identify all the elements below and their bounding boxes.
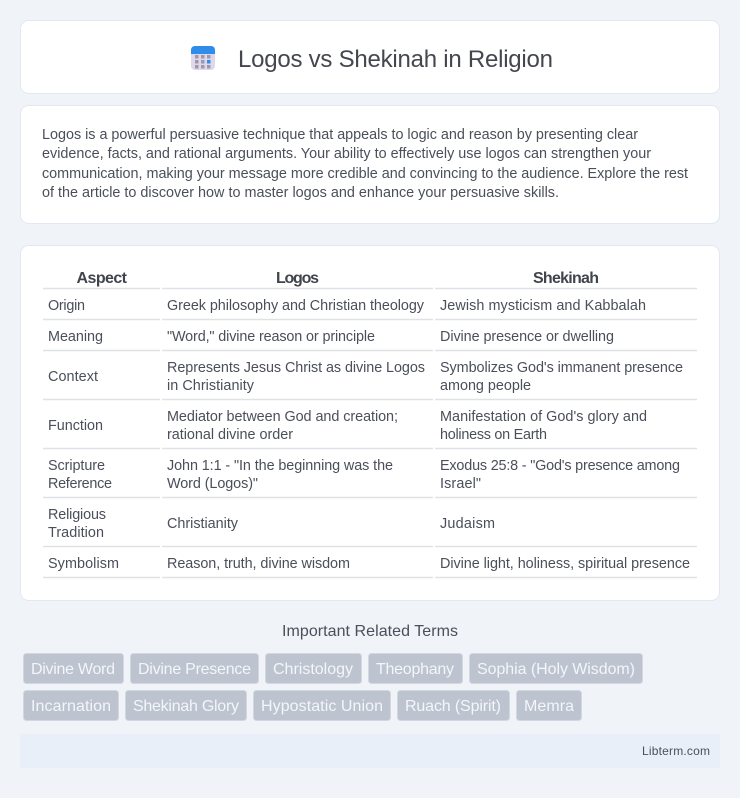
row: religious tradition: Judaism: [440, 516, 495, 532]
footer: [20, 734, 720, 768]
tag: Divine Presence: Divine Presence: [138, 661, 251, 678]
tag: Shekinah Glory: Shekinah Glory: [133, 698, 239, 715]
tag: Hypostatic Union: [254, 690, 390, 720]
row: origin: Greek philosophy and Christian theology: [167, 298, 425, 314]
tag: Ruach (Spirit): [398, 690, 510, 720]
table header row: [76, 270, 599, 287]
tag: Incarnation: [24, 690, 118, 720]
row: function: Mediator between God and creation;: [167, 409, 398, 425]
row: religious tradition: Tradition: [48, 525, 104, 541]
row: context: in Christianity: [167, 378, 255, 394]
row: context: [48, 360, 683, 394]
row: function: rational divine order: [167, 427, 293, 443]
row: religious tradition: [48, 507, 495, 541]
row: religious tradition: Religious: [48, 507, 106, 523]
tag: Divine Word: Divine Word: [31, 661, 115, 678]
row: scripture reference: Israel": [440, 476, 481, 492]
row: scripture reference: Exodus 25:8 - "God's presence among: [440, 458, 680, 474]
row: scripture reference: Reference: [48, 476, 112, 492]
tag: Theophany: [368, 654, 462, 684]
row: meaning: "Word," divine reason or principle: [167, 329, 375, 345]
panel: related term tags: [24, 654, 642, 720]
panel: comparison table: [20, 246, 720, 600]
row: symbolism: [48, 556, 690, 572]
row: meaning: Divine presence or dwelling: [440, 329, 614, 345]
table header row: Logos: [276, 270, 319, 287]
heading: important related terms: Important Related Terms: [282, 623, 458, 640]
row: scripture reference: John 1:1 - "In the beginning was the: [167, 458, 393, 474]
row: context: Context: [48, 369, 98, 385]
tag: Divine Presence: [130, 654, 258, 684]
row: function: Manifestation of God's glory and: [440, 409, 647, 425]
row: scripture reference: [48, 458, 680, 492]
row: meaning: Meaning: [48, 329, 103, 345]
text block: introduction paragraph: evidence, facts, and rational arguments. Your ability to effectively use logos can strengthen your: [42, 146, 651, 162]
row: context: among people: [440, 378, 531, 394]
footer: Libterm.com: [642, 744, 710, 758]
row: origin: [48, 298, 646, 314]
row: origin: Jewish mysticism and Kabbalah: [440, 298, 646, 314]
row: symbolism: Symbolism: [48, 556, 119, 572]
row: context: Represents Jesus Christ as divine Logos: [167, 360, 425, 376]
tag: Sophia (Holy Wisdom): [470, 654, 642, 684]
tag: Memra: Memra: [524, 698, 574, 715]
tag: Memra: [516, 690, 582, 720]
tag: Ruach (Spirit): Ruach (Spirit): [405, 698, 501, 715]
row: religious tradition: Christianity: [167, 516, 239, 532]
row: meaning: [48, 329, 614, 345]
tag: Christology: [266, 654, 362, 684]
table header row: Aspect: [76, 270, 128, 287]
row: context: Symbolizes God's immanent presence: [440, 360, 683, 376]
row: symbolism: Reason, truth, divine wisdom: [167, 556, 350, 572]
row: scripture reference: Scripture: [48, 458, 105, 474]
panel: header: [20, 20, 720, 94]
text block: introduction paragraph: [42, 127, 688, 201]
row: origin: Origin: [48, 298, 85, 314]
title: Logos vs Shekinah in Religion: [238, 46, 553, 73]
row: function: [48, 409, 647, 443]
tag: Sophia (Holy Wisdom): Sophia (Holy Wisdom): [477, 661, 635, 678]
tag: Hypostatic Union: Hypostatic Union: [261, 698, 383, 715]
tag: Divine Word: [24, 654, 124, 684]
row: scripture reference: Word (Logos)": [167, 476, 258, 492]
tag: Christology: Christology: [273, 661, 353, 678]
text block: introduction paragraph: Logos is a powerful persuasive technique that appeals to logic and reason by presenting clear: [42, 127, 638, 143]
icon: calendar: [191, 46, 215, 70]
tag: Shekinah Glory: [126, 690, 246, 720]
row: function: Function: [48, 418, 103, 434]
tag: Theophany: Theophany: [376, 661, 454, 678]
row: function: holiness on Earth: [440, 427, 547, 443]
row: symbolism: Divine light, holiness, spiritual presence: [440, 556, 690, 572]
table header row: Shekinah: [533, 270, 599, 287]
tag: Incarnation: Incarnation: [31, 698, 111, 715]
text block: introduction paragraph: communication, making your message more credible and convincing to the audience. Explore the rest: [42, 166, 688, 182]
panel: introduction: [20, 106, 720, 224]
text block: introduction paragraph: of the article to discover how to master logos and enhance your persuasive skills.: [42, 185, 559, 201]
